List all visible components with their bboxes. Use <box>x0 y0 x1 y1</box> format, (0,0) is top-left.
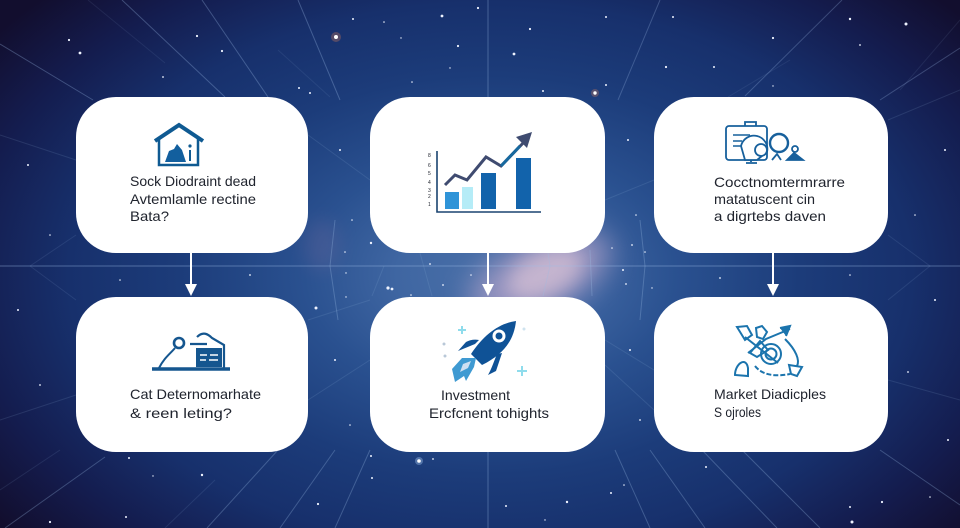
text: consultation: a digrtebs daven <box>714 208 826 224</box>
text: market: S ojroles <box>714 404 761 420</box>
text: stock question <box>130 173 256 224</box>
arrow: card 1 to card 4 <box>185 253 197 296</box>
icon: rocket <box>442 321 527 382</box>
icon: bar chart with rising arrow: 1 <box>428 202 431 208</box>
icon: briefcase and magnifier <box>726 122 803 163</box>
panel: investment card <box>370 297 605 452</box>
text: stock question: Bata? <box>130 208 169 224</box>
icon: bar chart with rising arrow: 2 <box>428 194 431 200</box>
icon: bar chart with rising arrow <box>428 132 541 212</box>
text: demonstrate: & reen leting? <box>130 405 232 421</box>
icon: house <box>155 125 203 165</box>
icon: bar chart with rising arrow: 8 <box>428 153 431 159</box>
text: market <box>714 386 826 420</box>
text: investment: Ercfcnent tohights <box>429 405 549 421</box>
panel: demonstrate card <box>76 297 308 452</box>
text: investment: Investment <box>441 387 510 403</box>
text: market: Market Diadicples <box>714 386 826 402</box>
text: consultation <box>714 174 845 224</box>
icon: bar chart with rising arrow: 6 <box>428 163 431 169</box>
icon: bar chart with rising arrow: 4 <box>428 180 431 186</box>
text: investment <box>429 387 549 421</box>
text: consultation: Cocctnomtermrarre <box>714 174 845 190</box>
icon: workstation <box>152 334 230 369</box>
icon: bar chart with rising arrow: 5 <box>428 171 431 177</box>
text: consultation: matatuscent cin <box>714 191 815 207</box>
arrow: card 2 to card 5 <box>482 253 494 296</box>
text: stock question: Avtemlamle rectine <box>130 191 256 207</box>
panel: growth chart card <box>370 97 605 253</box>
icon: bar chart with rising arrow: 3 <box>428 188 431 194</box>
text: stock question: Sock Diodraint dead <box>130 173 256 189</box>
text: demonstrate: Cat Deternomarhate <box>130 386 261 402</box>
icon: target and arrows <box>735 326 802 376</box>
panel: market card <box>654 297 888 452</box>
glowing orange stars <box>331 32 599 465</box>
arrow: card 3 to card 6 <box>767 253 779 296</box>
panel: stock question card <box>76 97 308 253</box>
text: demonstrate <box>130 386 261 421</box>
panel: consultation card <box>654 97 888 253</box>
